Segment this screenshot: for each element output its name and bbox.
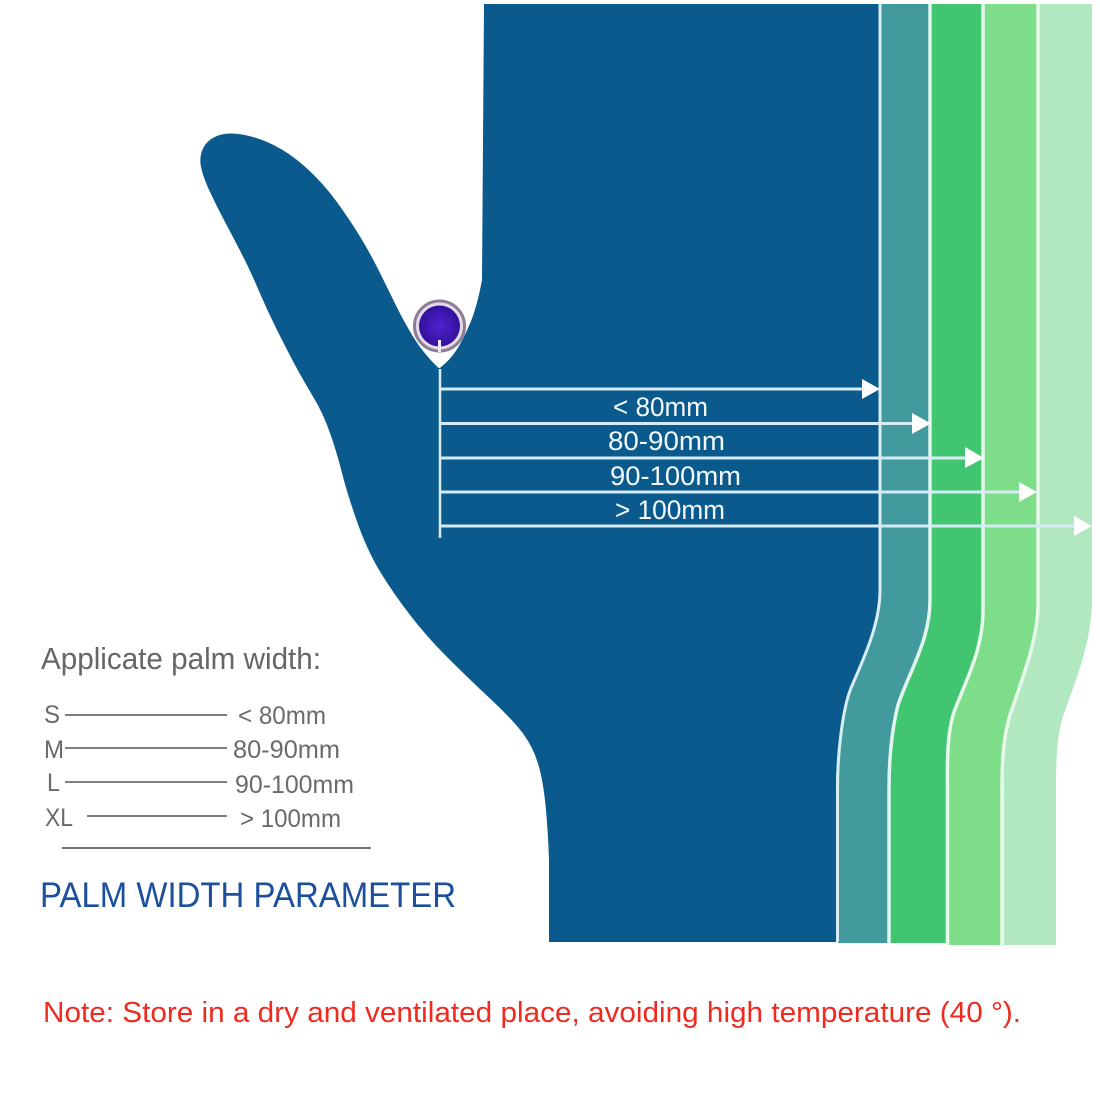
arrow: 90mm boundary	[440, 413, 931, 434]
label: over 100mm: > 100mm	[615, 495, 725, 525]
band: S	[830, 4, 930, 943]
measurement arrows	[440, 369, 1092, 538]
arrow labels	[608, 392, 741, 525]
label: 90-100mm: 90-100mm	[610, 461, 741, 491]
legend row: S: S	[44, 701, 60, 729]
legend row: XL: XL	[45, 804, 73, 832]
label: under 80mm: < 80mm	[613, 392, 708, 422]
storage note: Note: Store in a dry and ventilated place, avoiding high temperature (40 °).	[43, 997, 1021, 1029]
label: 80-90mm: 80-90mm	[608, 426, 725, 456]
title: palm width parameter: PALM WIDTH PARAMETER	[40, 876, 456, 915]
vertical baseline	[439, 369, 441, 538]
icon: thumb crotch marker	[414, 301, 464, 352]
legend row: L: L	[47, 769, 60, 797]
arrow: 80mm boundary	[440, 379, 880, 399]
glove hand silhouette	[200, 4, 879, 942]
legend row: M: M	[44, 736, 64, 764]
arrow: 100mm boundary	[440, 447, 984, 468]
legend row: M	[44, 736, 340, 764]
band: XL	[1000, 4, 1092, 945]
legend row: S	[44, 701, 326, 730]
band separators	[889, 4, 1038, 945]
band: M	[885, 4, 983, 943]
band: L	[940, 4, 1038, 945]
arrow: over 100mm boundary	[440, 482, 1037, 502]
legend row: XL	[45, 804, 341, 833]
legend row: L	[47, 769, 354, 799]
size legend	[44, 701, 354, 833]
legend row: M: 80-90mm	[233, 736, 340, 764]
legend row: L: 90-100mm	[235, 771, 354, 799]
heading: applicable palm width: Applicate palm width:	[41, 641, 321, 676]
palm edge highlight	[838, 4, 880, 942]
legend rule	[62, 847, 371, 849]
arrow: outer boundary	[440, 516, 1092, 536]
glove size bands	[830, 4, 1092, 945]
legend row: XL: > 100mm	[240, 805, 341, 833]
legend row: S: < 80mm	[238, 702, 326, 730]
